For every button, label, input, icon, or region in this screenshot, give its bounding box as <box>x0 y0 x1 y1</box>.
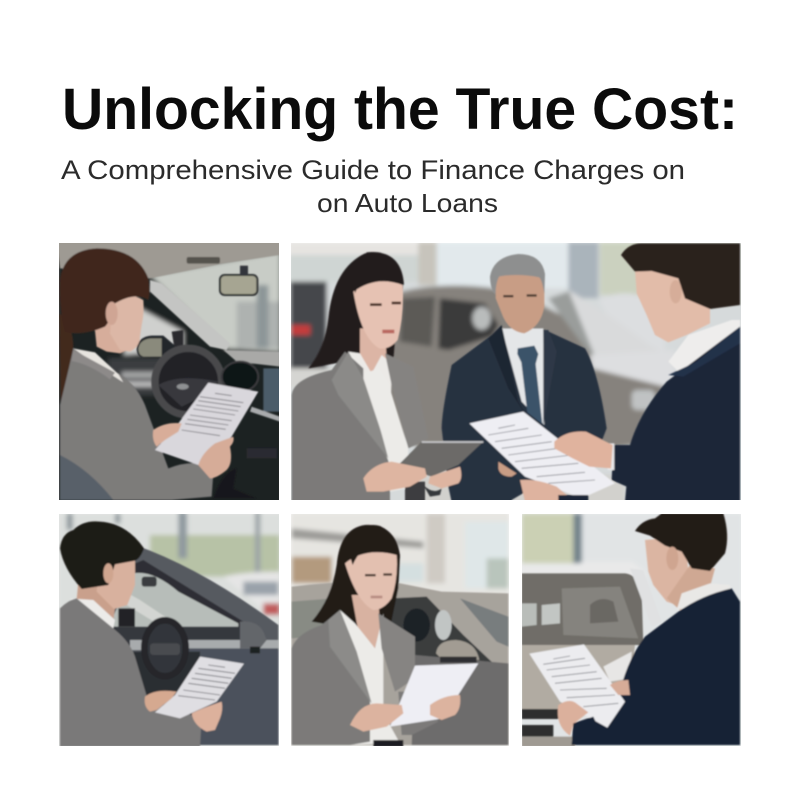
document <box>155 657 244 718</box>
neck and face <box>94 322 126 354</box>
man <box>77 582 115 620</box>
document <box>529 644 625 728</box>
steering wheel <box>155 348 222 415</box>
man <box>645 537 692 605</box>
panel: three people with document in showroom <box>291 243 741 500</box>
woman with tablet <box>292 252 483 503</box>
panel: woman reading paper by car <box>290 512 510 748</box>
subtitle: on Auto Loans <box>317 188 498 218</box>
title: Unlocking the True Cost: <box>62 77 738 142</box>
ponytail <box>59 313 73 403</box>
paper <box>155 383 258 465</box>
hair <box>60 248 150 333</box>
older man <box>440 253 608 500</box>
paper <box>390 663 478 727</box>
jacket <box>60 348 213 500</box>
ceiling <box>57 242 283 278</box>
door mirror <box>436 640 479 660</box>
dashboard details <box>222 362 258 392</box>
door mirror <box>240 621 267 648</box>
steering wheel <box>144 620 186 676</box>
seat <box>60 455 113 500</box>
woman <box>312 525 400 628</box>
document <box>469 412 615 498</box>
subtitle <box>61 155 685 218</box>
hands <box>153 423 182 447</box>
panel: woman reading document in car <box>57 242 283 505</box>
panel: man in navy suit reading document <box>520 512 743 748</box>
panel: man reading document beside car <box>57 512 283 748</box>
young man in navy <box>469 243 740 502</box>
subtitle: A Comprehensive Guide to Finance Charges on <box>61 155 685 185</box>
